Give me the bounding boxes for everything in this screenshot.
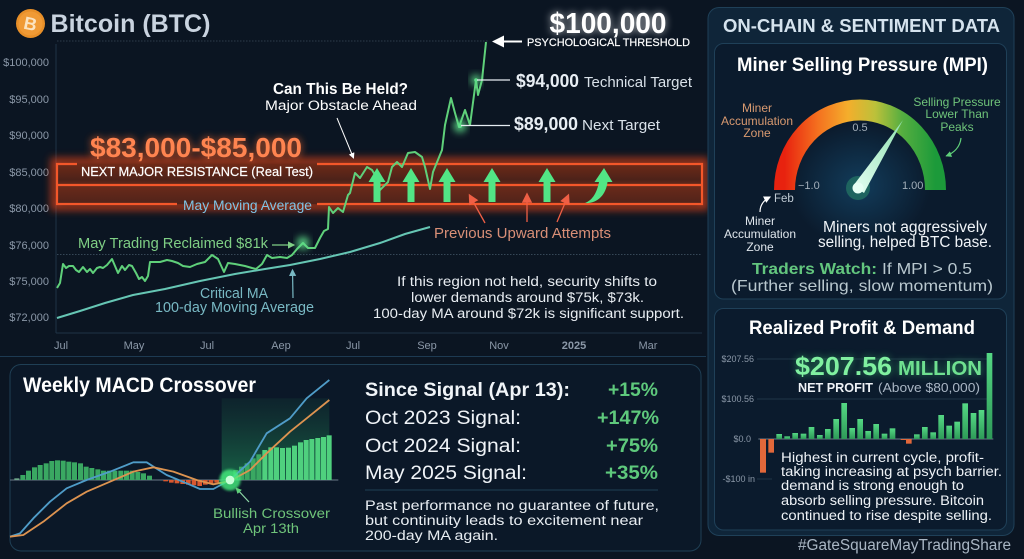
net profit figure: MILLION [898, 358, 982, 380]
net profit figure: $207.56 [795, 351, 892, 381]
x axis labels [54, 340, 658, 352]
obstacle callout [265, 81, 417, 158]
gauge: −1.0 [798, 180, 820, 192]
realized profit bar chart: -$100 in [722, 474, 755, 484]
critical MA label with arrow: 100-day Moving Average [155, 300, 314, 316]
miner accumulation zone orange label [721, 101, 793, 140]
hashtag: #GateSquareMayTradingShare [798, 537, 1011, 554]
bitcoin logo icon: B [22, 13, 39, 35]
panel: weekly MACD crossover [10, 364, 701, 551]
resistance subtitle: NEXT MAJOR RESISTANCE (Real Test) [81, 164, 313, 179]
miner accumulation zone white label with arrow: Accumulation [724, 227, 796, 241]
traders watch note: If MPI > 0.5 [882, 261, 972, 278]
signal performance table: Oct 2024 Signal: [365, 436, 521, 457]
gauge [774, 110, 936, 205]
BTC price line [57, 42, 486, 288]
x axis labels: Jul [54, 340, 68, 352]
realized profit bar chart: $100.56 [721, 394, 754, 404]
y axis labels: $80,000 [9, 203, 49, 215]
MACD heading: Weekly MACD Crossover [23, 374, 256, 397]
support note: lower demands around $75k, $73k. [411, 290, 644, 306]
previous upward attempts label: Previous Upward Attempts [434, 226, 611, 242]
psychological threshold callout: $100,000 [550, 8, 666, 40]
miner note [818, 219, 992, 251]
panel: miner selling pressure [714, 44, 1006, 299]
psychological threshold callout [494, 8, 690, 49]
realized profit note: Highest in current cycle, profit- [781, 450, 984, 466]
orange signal line [10, 400, 329, 537]
miner accumulation zone orange label: Zone [743, 126, 771, 140]
signal performance table: +35% [605, 463, 658, 484]
x axis labels: May [124, 340, 145, 352]
miner accumulation zone orange label: Accumulation [721, 114, 793, 128]
main price chart [3, 41, 704, 352]
x axis labels: Mar [639, 340, 658, 352]
miner accumulation zone white label with arrow [724, 197, 796, 254]
y axis labels: $100,000 [3, 57, 49, 69]
support note: If this region not held, security shifts to [397, 274, 657, 290]
y axis labels: $95,000 [9, 94, 49, 106]
may moving average label: May Moving Average [183, 198, 312, 214]
MPI heading: Miner Selling Pressure (MPI) [737, 54, 988, 76]
on-chain heading: ON-CHAIN & SENTIMENT DATA [723, 15, 1000, 36]
realized profit note: taking increasing at psych barrier. [781, 464, 1002, 480]
green upward arrows [368, 168, 612, 203]
realized profit note: continued to rise despite selling. [781, 508, 992, 524]
realized profit heading: Realized Profit & Demand [749, 318, 975, 339]
signal performance table: +147% [597, 408, 659, 429]
x axis labels: Sep [417, 340, 437, 352]
miner note: selling, helped BTC base. [818, 234, 992, 251]
x axis labels: Jul [346, 340, 360, 352]
realized profit note: absorb selling pressure. Bitcoin [781, 493, 984, 509]
blue MACD line [10, 380, 329, 537]
obstacle callout: Major Obstacle Ahead [265, 98, 417, 114]
crossover dot [219, 469, 241, 491]
disclaimer note: Past performance no guarantee of future, [365, 498, 659, 514]
miner note: Miners not aggressively [823, 219, 987, 236]
traders watch note: Traders Watch: [752, 261, 877, 278]
signal performance table [365, 380, 659, 484]
support note [373, 274, 684, 322]
x axis labels: Nov [489, 340, 509, 352]
miner accumulation zone white label with arrow: Miner [745, 214, 775, 228]
technical target callout [477, 71, 692, 91]
x axis labels: Aep [271, 340, 291, 352]
traders watch note [731, 261, 993, 295]
bitcoin logo icon [16, 9, 45, 38]
signal performance table: May 2025 Signal: [365, 463, 527, 484]
gauge: 0.5 [852, 122, 868, 134]
disclaimer note: 200-day MA again. [365, 528, 498, 544]
panel: on-chain and sentiment data [708, 8, 1014, 536]
100-day moving average line [57, 227, 430, 318]
y axis labels: $75,000 [9, 276, 49, 288]
red attempt arrows [470, 195, 568, 223]
support note: 100-day MA around $72k is significant support. [373, 306, 684, 322]
selling pressure label with arrow [913, 95, 1001, 156]
disclaimer note: but continuity leads to excitement near [365, 513, 643, 529]
net profit figure [795, 351, 982, 395]
technical target callout: Technical Target [584, 75, 692, 91]
miner accumulation zone orange label: Miner [742, 101, 772, 115]
gauge: 1.00 [902, 180, 923, 192]
resistance price heading: $83,000-$85,000 [90, 132, 302, 163]
MACD chart [10, 380, 338, 537]
psychological threshold callout: $100,000 [550, 8, 666, 40]
y axis labels: $90,000 [9, 130, 49, 142]
miner accumulation zone white label with arrow: Zone [746, 240, 774, 254]
signal performance table: Oct 2023 Signal: [365, 408, 521, 429]
disclaimer note [365, 498, 659, 544]
next target callout: $89,000 [514, 114, 578, 134]
obstacle callout: Can This Be Held? [273, 81, 408, 98]
selling pressure label with arrow: Lower Than [925, 107, 989, 121]
panel: realized profit and demand [714, 308, 1006, 530]
bullish crossover label: Apr 13th [243, 521, 299, 537]
resistance band [55, 162, 704, 206]
y axis labels: $76,000 [9, 240, 49, 252]
realized profit bar chart [721, 353, 993, 484]
y axis labels [3, 57, 49, 324]
realized profit note: demand is strong enough to [781, 478, 964, 494]
realized profit note [781, 450, 1002, 524]
y axis labels: $85,000 [9, 167, 49, 179]
realized profit bar chart: $207.56 [721, 354, 754, 364]
title: Bitcoin (BTC) [50, 10, 210, 38]
net profit figure: MILLION [898, 358, 982, 380]
signal performance table: +75% [606, 436, 658, 457]
next target callout [461, 114, 660, 134]
signal performance table: +15% [608, 380, 658, 401]
x axis labels: Jul [200, 340, 214, 352]
next target callout: Next Target [582, 118, 660, 134]
may trading label with arrow: May Trading Reclaimed $81k [78, 236, 269, 252]
gauge: Feb [774, 193, 794, 205]
resistance price heading: $83,000-$85,000 [90, 132, 302, 163]
critical MA label with arrow [155, 270, 314, 316]
price highlight glows [297, 75, 481, 249]
y axis labels: $72,000 [9, 312, 49, 324]
x axis labels: 2025 [562, 340, 586, 352]
realized profit bar chart: $0.0 [733, 434, 751, 444]
net profit figure: $207.56 [795, 351, 892, 381]
critical MA label with arrow: Critical MA [200, 286, 268, 302]
technical target callout: $94,000 [516, 71, 579, 91]
bullish crossover label [213, 488, 330, 537]
selling pressure label with arrow: Selling Pressure [913, 95, 1001, 109]
selling pressure label with arrow: Peaks [940, 120, 974, 134]
net profit figure: (Above $80,000) [878, 380, 980, 395]
traders watch note: (Further selling, slow momentum) [731, 278, 993, 295]
psychological threshold callout: PSYCHOLOGICAL THRESHOLD [527, 37, 690, 49]
bullish crossover label: Bullish Crossover [213, 506, 330, 522]
net profit figure: NET PROFIT [798, 380, 873, 395]
signal performance table: Since Signal (Apr 13): [365, 380, 570, 401]
histogram bars [14, 435, 332, 480]
